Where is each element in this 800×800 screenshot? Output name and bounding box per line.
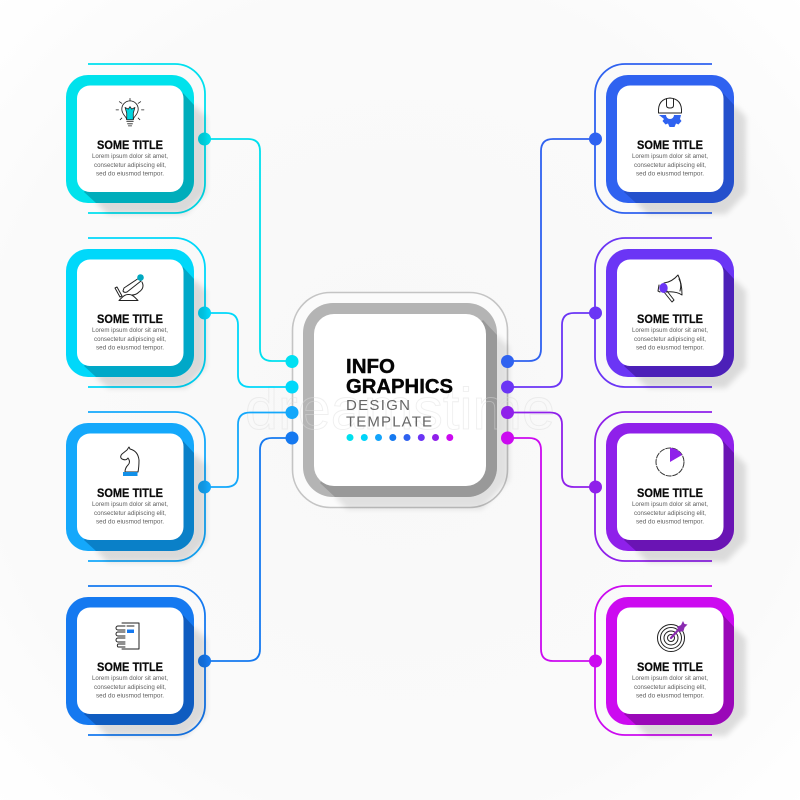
card: right 4 target: sed do eiusmod tempor. bbox=[636, 692, 704, 700]
card: left 4 notebook bbox=[66, 586, 206, 736]
center title: DESIGN bbox=[346, 397, 410, 414]
icon: pie chart bbox=[656, 448, 684, 476]
card: right 2 megaphone: SOME TITLE bbox=[637, 312, 703, 326]
card: left 1 lightbulb: consectetur adipiscing elit, bbox=[94, 162, 166, 169]
center colour dots bbox=[346, 434, 453, 441]
card: left 4 notebook: SOME TITLE bbox=[97, 660, 163, 674]
card: left 1 lightbulb bbox=[66, 64, 206, 214]
card: right 4 target bbox=[595, 586, 746, 736]
icon: megaphone bbox=[658, 275, 682, 302]
center title: INFO bbox=[346, 356, 395, 378]
connector: left 1 bbox=[198, 132, 298, 368]
connector: right 3 bbox=[501, 406, 602, 494]
card: left 4 notebook: consectetur adipiscing elit, bbox=[94, 684, 166, 691]
card: right 2 megaphone: consectetur adipiscing elit, bbox=[634, 336, 706, 343]
watermark: dreamstime bbox=[245, 377, 555, 442]
card: left 2 microscope bbox=[66, 238, 206, 388]
card: right 1 helmet: consectetur adipiscing elit, bbox=[634, 162, 706, 169]
card: right 4 target: Lorem ipsum dolor sit amet, bbox=[632, 675, 708, 682]
card: left 4 notebook: sed do eiusmod tempor. bbox=[96, 692, 164, 700]
center panel bbox=[245, 303, 555, 509]
card: right 3 pie chart bbox=[595, 412, 746, 562]
card: left 2 microscope: Lorem ipsum dolor sit amet, bbox=[92, 327, 168, 334]
card: left 3 chess knight: consectetur adipiscing elit, bbox=[94, 510, 166, 517]
card: left 1 lightbulb: sed do eiusmod tempor. bbox=[96, 170, 164, 178]
connector: left 2 bbox=[198, 306, 298, 394]
center title: GRAPHICS bbox=[346, 376, 453, 398]
card: right 3 pie chart: Lorem ipsum dolor sit amet, bbox=[632, 501, 708, 508]
card: right 1 helmet: sed do eiusmod tempor. bbox=[636, 170, 704, 178]
card: left 3 chess knight bbox=[66, 412, 206, 562]
card: right 2 megaphone bbox=[595, 238, 746, 388]
card: right 4 target: consectetur adipiscing elit, bbox=[634, 684, 706, 691]
connector: left 4 bbox=[198, 432, 298, 668]
icon: lightbulb bbox=[116, 98, 144, 126]
connector: left 3 bbox=[198, 406, 298, 494]
card: left 1 lightbulb: SOME TITLE bbox=[97, 138, 163, 152]
card: right 1 helmet: Lorem ipsum dolor sit amet, bbox=[632, 153, 708, 160]
card: right 2 megaphone: sed do eiusmod tempor. bbox=[636, 344, 704, 352]
card: right 4 target: SOME TITLE bbox=[637, 660, 703, 674]
center title bbox=[346, 356, 453, 430]
card: right 1 helmet bbox=[595, 64, 746, 214]
icon: chess knight bbox=[121, 447, 139, 476]
card: right 3 pie chart: consectetur adipiscing elit, bbox=[634, 510, 706, 517]
icon: microscope bbox=[115, 275, 143, 300]
card: right 2 megaphone: Lorem ipsum dolor sit amet, bbox=[632, 327, 708, 334]
icon: notebook bbox=[116, 623, 139, 649]
card: left 2 microscope: sed do eiusmod tempor. bbox=[96, 344, 164, 352]
connector: right 2 bbox=[501, 306, 602, 394]
icon: target with dart bbox=[658, 621, 688, 652]
card: left 3 chess knight: sed do eiusmod tempor. bbox=[96, 518, 164, 526]
card: right 3 pie chart: SOME TITLE bbox=[637, 486, 703, 500]
card: left 2 microscope: SOME TITLE bbox=[97, 312, 163, 326]
card: left 1 lightbulb: Lorem ipsum dolor sit amet, bbox=[92, 153, 168, 160]
connector: right 1 bbox=[501, 132, 602, 368]
connector: right 4 bbox=[501, 432, 602, 668]
card: left 4 notebook: Lorem ipsum dolor sit amet, bbox=[92, 675, 168, 682]
card: left 3 chess knight: SOME TITLE bbox=[97, 486, 163, 500]
card: right 3 pie chart: sed do eiusmod tempor. bbox=[636, 518, 704, 526]
card: right 1 helmet: SOME TITLE bbox=[637, 138, 703, 152]
center title: TEMPLATE bbox=[346, 414, 432, 430]
center outline frame bbox=[292, 292, 508, 508]
card: left 3 chess knight: Lorem ipsum dolor sit amet, bbox=[92, 501, 168, 508]
card: left 2 microscope: consectetur adipiscing elit, bbox=[94, 336, 166, 343]
icon: helmet and gear bbox=[658, 98, 682, 127]
